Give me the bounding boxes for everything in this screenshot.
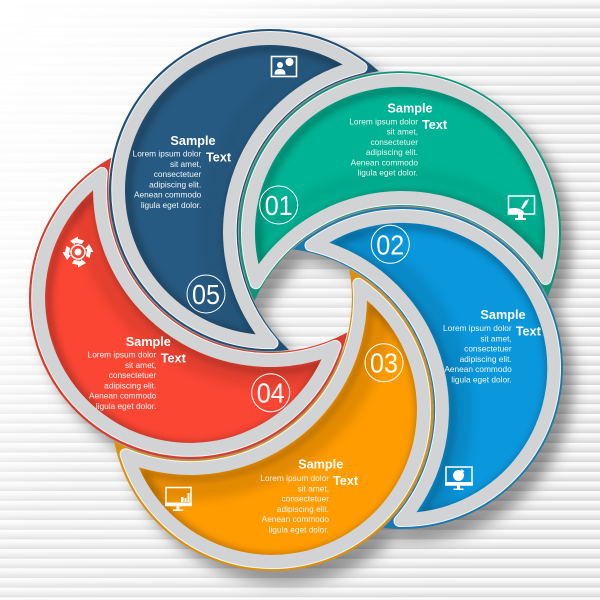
panel: step 05 dark blue crescent (109, 29, 379, 351)
icon: monitor with bar chart (165, 488, 192, 511)
text block: step 01: sit amet, (387, 127, 418, 137)
text block: step 03: Text (333, 474, 359, 488)
text block: step 04: Lorem ipsum dolor (88, 350, 157, 360)
number badge 01: 01 (265, 190, 293, 221)
text block: step 01: ligula eget dolor. (358, 168, 418, 178)
text block: step 05: Lorem ipsum dolor (133, 149, 202, 159)
text block: step 02: Text (516, 325, 542, 339)
text block: step 04 (88, 335, 187, 411)
number badge 04: 04 (257, 378, 285, 409)
number badge 03 (365, 344, 403, 382)
text block: step 03: ligula eget dolor. (269, 524, 329, 534)
text block: step 02: consectetuer (464, 344, 512, 354)
text block: step 05: adipiscing elit. (149, 180, 201, 190)
text block: step 04: consectetuer (109, 370, 157, 380)
number badge 05 (187, 275, 225, 313)
panel: step 01 green crescent (239, 71, 561, 301)
text block: step 03: sit amet, (298, 483, 329, 493)
number badge 02: 02 (376, 229, 404, 260)
icon: monitor with plant (508, 196, 534, 220)
text block: step 04: Aenean commodo (89, 391, 157, 401)
text block: step 02: sit amet, (480, 333, 512, 343)
text block: step 01: Aenean commodo (351, 157, 418, 167)
text block: step 04: Sample (126, 335, 171, 349)
panel: step 03 orange crescent (114, 268, 434, 572)
text block: step 02: adipiscing elit. (460, 354, 512, 364)
text block: step 02 (443, 308, 542, 384)
text block: step 03: Sample (298, 458, 343, 472)
number badge 01 (260, 186, 298, 224)
icon: presenter with pie chart (272, 56, 296, 76)
text block: step 03 (260, 458, 359, 534)
number badge 02 (371, 225, 409, 263)
text block: step 05: Aenean commodo (134, 190, 202, 200)
panel: step 04 red crescent (29, 158, 348, 459)
text block: step 01: adipiscing elit. (366, 147, 418, 157)
text block: step 03: consectetuer (281, 494, 329, 504)
number badge 05: 05 (192, 279, 220, 310)
number badge 04 (252, 374, 290, 412)
text block: step 05: sit amet, (170, 159, 201, 169)
text block: step 03: Lorem ipsum dolor (260, 473, 329, 483)
text block: step 05: consectetuer (154, 169, 202, 179)
text block: step 02: Aenean commodo (444, 364, 512, 374)
number badge 03: 03 (370, 348, 398, 379)
text block: step 01: consectetuer (370, 137, 418, 147)
text block: step 01: Lorem ipsum dolor (349, 116, 418, 126)
text block: step 03: adipiscing elit. (277, 504, 329, 514)
text block: step 04: ligula eget dolor. (96, 401, 156, 411)
text block: step 05: ligula eget dolor. (141, 200, 201, 210)
text block: step 02: Lorem ipsum dolor (443, 323, 512, 333)
text block: step 01: Sample (387, 102, 433, 116)
text block: step 04: adipiscing elit. (104, 380, 156, 390)
text block: step 05: Text (206, 150, 232, 164)
text block: step 03: Aenean commodo (262, 514, 329, 524)
text block: step 02: ligula eget dolor. (451, 374, 512, 384)
text block: step 01 (349, 102, 448, 178)
text block: step 02: Sample (480, 308, 526, 322)
text block: step 04: Text (161, 352, 187, 366)
icon: monitor with pie chart (445, 467, 473, 490)
text block: step 01: Text (422, 118, 448, 132)
text block: step 05 (133, 134, 232, 210)
panel: step 02 blue crescent (293, 207, 563, 529)
text block: step 05: Sample (170, 134, 216, 148)
text block: step 04: sit amet, (125, 360, 156, 370)
icon: circular arrows with clock (62, 236, 94, 268)
